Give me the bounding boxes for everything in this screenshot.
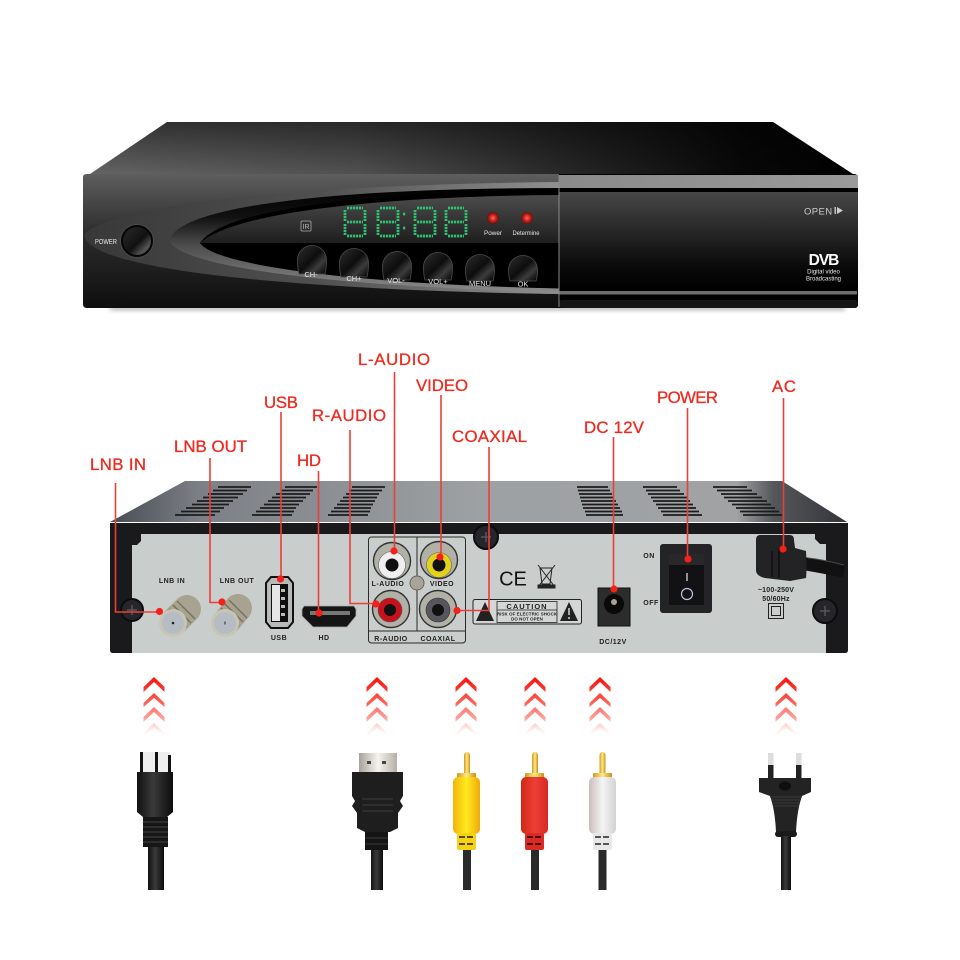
DVB logo bbox=[806, 252, 841, 282]
caution label: DO NOT OPEN bbox=[511, 616, 543, 622]
callout: HD bbox=[297, 451, 323, 617]
status LEDs bbox=[484, 212, 540, 237]
front control buttons: CH+ bbox=[346, 274, 362, 283]
rear view of set-top box bbox=[110, 481, 848, 653]
callout: LNB OUT: LNB OUT bbox=[174, 437, 247, 456]
front control buttons: MENU bbox=[469, 279, 491, 288]
caution label: CAUTION bbox=[506, 602, 548, 611]
power button bbox=[95, 224, 154, 258]
IR window icon bbox=[301, 221, 311, 231]
center screw bbox=[410, 576, 424, 590]
cable: HDMI plug bbox=[352, 753, 403, 890]
callout: HD: HD bbox=[297, 451, 321, 470]
callout: VIDEO: VIDEO bbox=[416, 376, 468, 395]
cable: red RCA plug bbox=[521, 752, 548, 890]
cable: LNB plug bbox=[137, 752, 173, 890]
cable: white RCA plug bbox=[589, 752, 616, 890]
voltage rating: ~100-250V bbox=[758, 587, 794, 594]
open label: OPEN bbox=[804, 206, 833, 218]
USB port: USB bbox=[271, 635, 287, 642]
USB port bbox=[266, 577, 293, 642]
VIDEO jack: VIDEO bbox=[430, 581, 454, 588]
arrow: red RCA bbox=[524, 677, 546, 736]
LNB IN connector bbox=[159, 578, 195, 637]
arrow: white RCA bbox=[590, 677, 610, 736]
voltage rating bbox=[758, 587, 794, 618]
DVB logo: DVB bbox=[809, 252, 839, 269]
callout: POWER: POWER bbox=[657, 388, 718, 407]
callout: L-AUDIO: L-AUDIO bbox=[358, 350, 430, 369]
arrow: HDMI cable bbox=[366, 677, 388, 736]
DC 12V jack bbox=[598, 588, 630, 646]
callout: L-AUDIO bbox=[358, 350, 430, 555]
front control buttons: VOL+ bbox=[428, 277, 448, 286]
HDMI port bbox=[302, 606, 356, 642]
front control buttons: OK bbox=[518, 280, 528, 288]
AC power inlet and cable bbox=[756, 535, 844, 581]
callout: POWER bbox=[657, 388, 718, 563]
front swoosh bbox=[85, 182, 559, 294]
power rocker switch: ON bbox=[643, 553, 655, 560]
callout: LNB IN: LNB IN bbox=[90, 455, 146, 474]
status LEDs: Determine bbox=[512, 230, 540, 237]
LNB IN connector: LNB IN bbox=[159, 578, 185, 585]
right door bbox=[559, 174, 858, 308]
power rocker switch bbox=[643, 544, 712, 613]
IR window icon: IR bbox=[302, 224, 310, 231]
display surround bbox=[170, 188, 559, 292]
arrow: AC plug bbox=[776, 677, 796, 736]
CE mark: CE bbox=[499, 568, 527, 590]
callout: LNB OUT bbox=[174, 437, 247, 606]
cable: yellow RCA plug bbox=[453, 752, 480, 890]
arrow: yellow RCA bbox=[456, 677, 476, 736]
L-AUDIO jack: L-AUDIO bbox=[372, 581, 404, 588]
front shadow bbox=[110, 306, 845, 310]
LNB OUT connector bbox=[211, 578, 255, 637]
callout: LNB IN bbox=[90, 455, 163, 615]
voltage rating: 50/60Hz bbox=[762, 596, 790, 603]
DVB logo: Digital video bbox=[807, 270, 841, 276]
HDMI port: HD bbox=[318, 635, 330, 642]
callout: DC 12V bbox=[584, 418, 645, 593]
frame corner cuts bbox=[132, 534, 826, 545]
LED clock display 88:88 bbox=[345, 208, 466, 236]
DVB logo: Broadcasting bbox=[806, 276, 841, 282]
display window bbox=[200, 195, 559, 243]
callout: R-AUDIO bbox=[312, 406, 386, 608]
front view of set-top box bbox=[83, 122, 858, 310]
status LEDs: Power bbox=[484, 230, 503, 237]
R-AUDIO jack: R-AUDIO bbox=[374, 636, 408, 643]
callout: USB: USB bbox=[264, 393, 298, 412]
arrows: upward chevrons bbox=[144, 677, 796, 736]
chassis screws bbox=[121, 525, 837, 623]
cable: AC power plug bbox=[759, 753, 811, 890]
display black recess bbox=[200, 190, 559, 288]
caution label bbox=[473, 600, 582, 624]
front control buttons bbox=[298, 246, 538, 288]
DC 12V jack: DC/12V bbox=[599, 639, 627, 646]
WEEE bin icon bbox=[538, 565, 555, 588]
lid vents bbox=[175, 487, 782, 515]
callout: VIDEO bbox=[416, 376, 468, 561]
rear black frame bbox=[110, 523, 848, 653]
LNB OUT connector: LNB OUT bbox=[220, 578, 255, 585]
callout: COAXIAL: COAXIAL bbox=[452, 427, 527, 446]
AV jack panel bbox=[368, 537, 466, 643]
door seam bbox=[558, 175, 560, 307]
callout: R-AUDIO: R-AUDIO bbox=[312, 406, 386, 425]
arrow: LNB cable bbox=[144, 677, 164, 736]
rear panel bbox=[132, 534, 826, 653]
top cover bbox=[87, 122, 856, 176]
power rocker switch: OFF bbox=[643, 600, 659, 607]
callout: DC 12V: DC 12V bbox=[584, 418, 645, 437]
rear lid bbox=[110, 481, 847, 522]
callout: AC bbox=[772, 377, 796, 553]
power button: POWER bbox=[95, 237, 117, 246]
callout: AC: AC bbox=[772, 377, 796, 396]
front control buttons: VOL- bbox=[387, 276, 405, 285]
front control buttons: CH- bbox=[304, 270, 318, 279]
COAXIAL jack: COAXIAL bbox=[420, 636, 456, 643]
callout: COAXIAL bbox=[452, 427, 527, 614]
callout: USB bbox=[264, 393, 298, 583]
front face left section bbox=[83, 174, 559, 308]
caution label: RISK OF ELECTRIC SHOCK bbox=[497, 612, 558, 616]
